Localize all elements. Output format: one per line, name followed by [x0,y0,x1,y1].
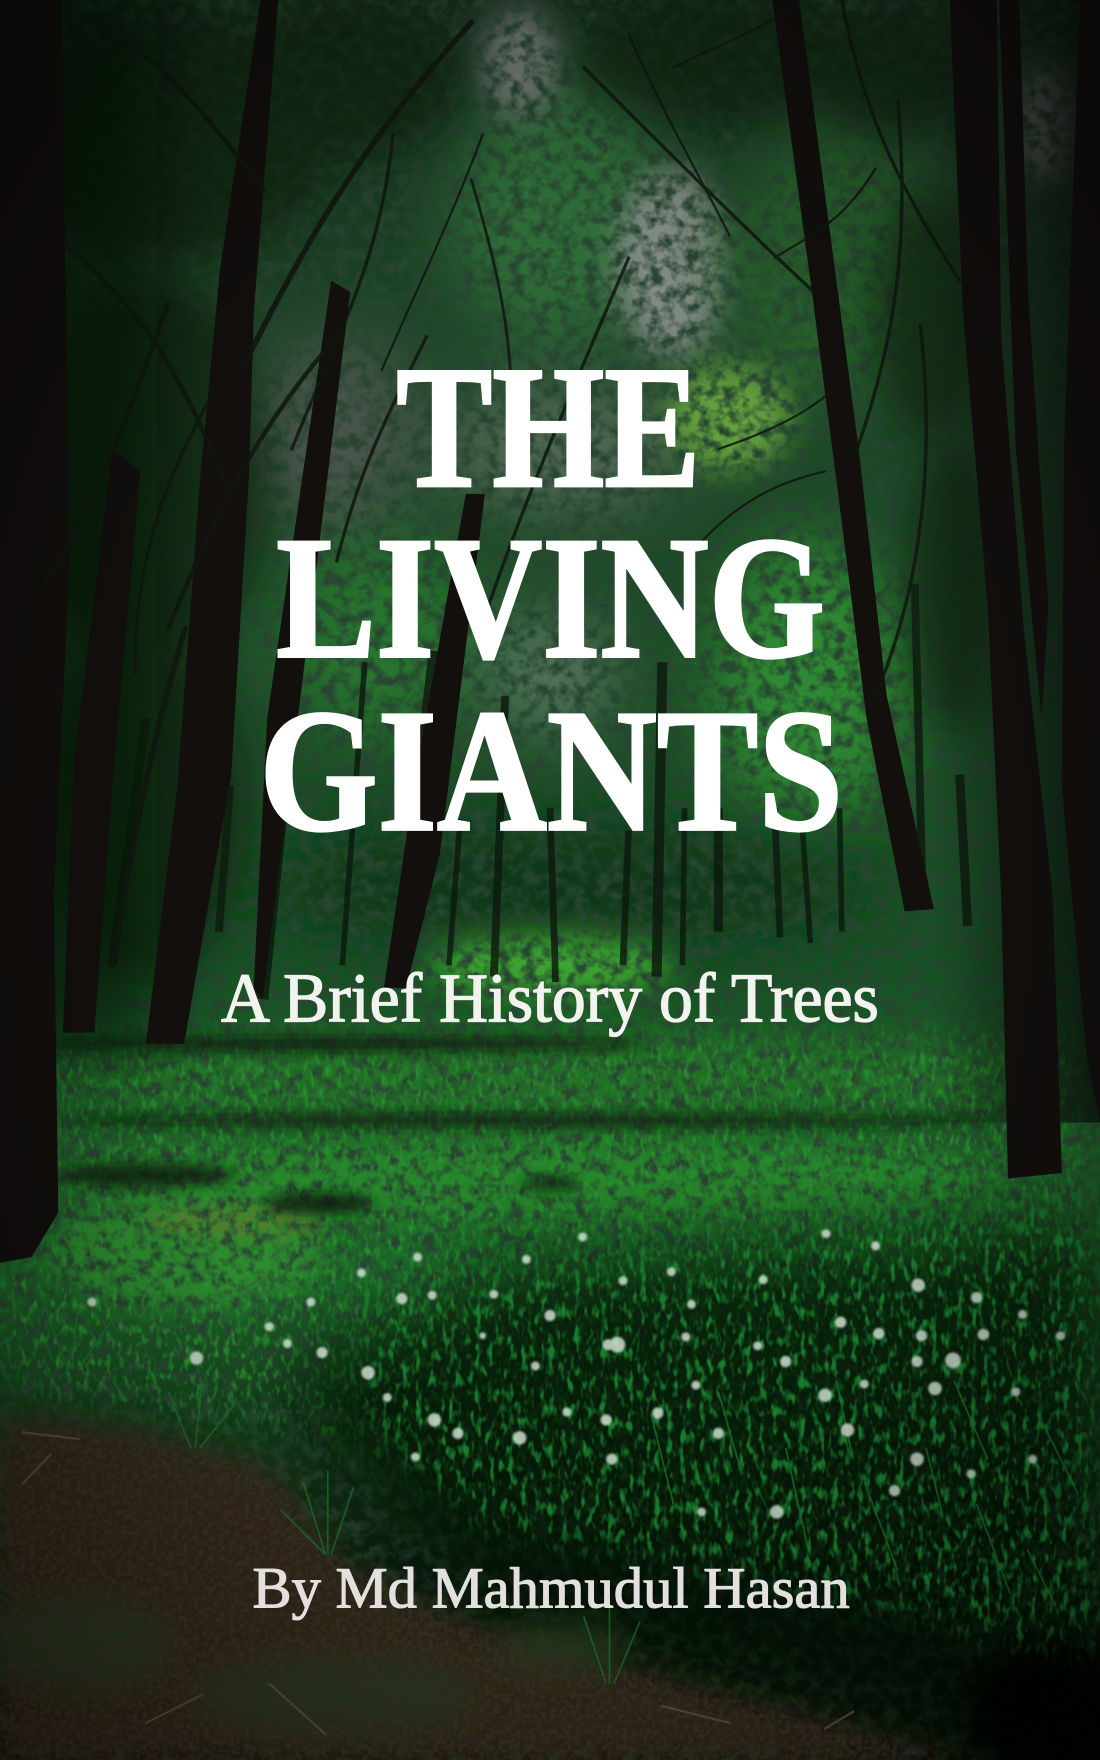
tree: right second trunk [999,0,1048,718]
tree: far right trunk [1062,0,1100,1122]
title: THE [396,330,700,524]
dark foliage clusters [0,0,999,977]
tree: right centre trunk [772,0,934,911]
branches [45,0,960,965]
left edge shade [0,0,157,1055]
grass tufts [45,1302,1078,1684]
hedge shadows [22,1036,999,1214]
tree: left large trunk [146,0,278,1044]
dirt path [0,1403,965,1760]
tree: second left trunk [63,449,140,1033]
soil texture [0,1403,965,1760]
bottom right shadow [965,1639,1100,1760]
white flowers [88,1229,1065,1519]
tree: centre left trunk [384,494,485,988]
tree: far left trunk [0,0,70,1263]
title: LIVING [276,501,825,695]
dark foreground shadow [281,1223,1100,1760]
meadow [0,988,1100,1760]
meadow grass texture [0,1022,1100,1632]
author: By Md Mahmudul Hasan [253,1555,850,1620]
distant trunks [112,584,968,999]
right edge shade [932,0,1100,1122]
title: GIANTS [259,673,843,867]
soil patch [0,1417,965,1760]
title [259,330,843,867]
moss patches [0,1597,629,1735]
flower bed speckle [330,1186,1100,1662]
tree: right large trunk [950,0,1062,1179]
main trees [0,0,1100,1263]
subtitle: A Brief History of Trees [221,960,879,1037]
twigs [22,1432,853,1734]
tree: inner left slim trunk [254,281,350,999]
